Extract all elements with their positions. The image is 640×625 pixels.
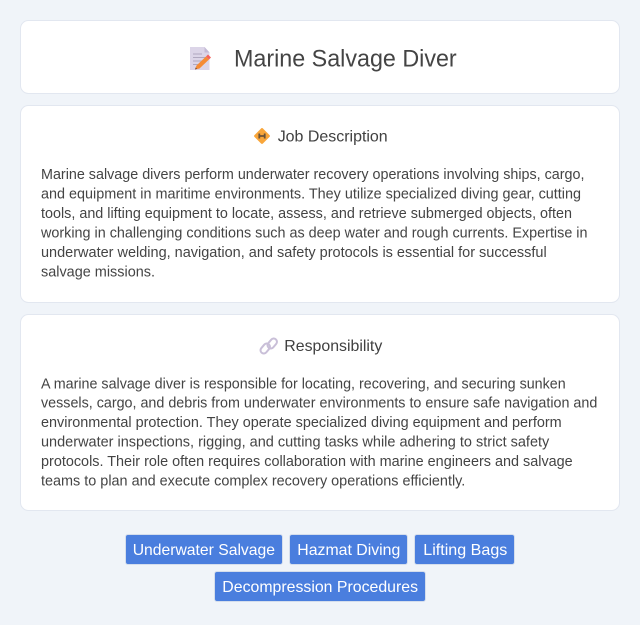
tag: hazmat diving: Hazmat Diving [297, 542, 400, 559]
tag: hazmat diving [290, 534, 408, 564]
text block: responsibility: protocols. Their role often requires collaboration with marine engineers and salvage [41, 454, 573, 470]
panel: title card [20, 20, 620, 94]
text block: job description: and equipment in maritime environments. They utilize specialized diving gear, cutting [41, 186, 581, 202]
text block: responsibility: underwater inspections, rigging, and cutting tasks while adhering to strict safety [41, 435, 550, 451]
text block: job description: salvage missions. [41, 264, 155, 280]
panel: job description [20, 106, 620, 302]
title: Marine Salvage Diver [234, 46, 457, 73]
heading: responsibility: Responsibility [284, 338, 382, 355]
tag: lifting bags: Lifting Bags [423, 542, 507, 559]
tag: decompression procedures [214, 572, 426, 602]
text block: responsibility: vessels, cargo, and debris from underwater environments to ensure safe navigation and [41, 396, 597, 412]
text block: job description: working in challenging conditions such as deep water and rough currents. Expertise in [40, 226, 588, 242]
icon: document with pencil [190, 47, 211, 70]
text block: responsibility: environmental protection. They operate specialized diving equipment and perform [41, 415, 562, 431]
tag: underwater salvage: Underwater Salvage [133, 542, 275, 559]
text block: responsibility: A marine salvage diver is responsible for locating, recovering, and securing sunken [41, 376, 566, 392]
text block: responsibility [41, 376, 597, 489]
tag: lifting bags [414, 534, 514, 564]
text block: responsibility: teams to plan and execute complex recovery operations efficiently. [41, 473, 465, 489]
icon: chain link [259, 337, 278, 355]
text block: job description: underwater welding, navigation, and safety protocols is essential for successful [41, 245, 547, 261]
text block: job description: Marine salvage divers perform underwater recovery operations involving ships, cargo, [41, 167, 584, 183]
text block: job description: tools, and lifting equipment to locate, assess, and retrieve submerged objects, often [41, 206, 572, 222]
text block: job description [40, 167, 588, 280]
tag: decompression procedures: Decompression Procedures [222, 579, 418, 596]
tag: underwater salvage [126, 534, 282, 564]
heading: job description: Job Description [278, 128, 388, 146]
icon: orange diamond sign [254, 128, 270, 144]
panel: responsibility [20, 314, 620, 510]
